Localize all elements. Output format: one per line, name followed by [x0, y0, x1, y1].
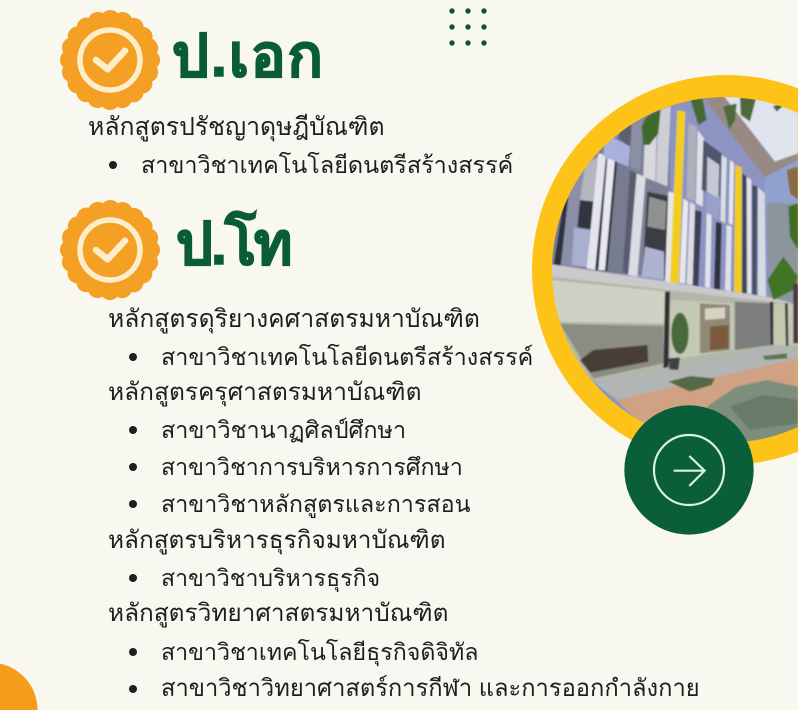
bullet item: สาขาวิชาหลักสูตรและการสอน	[161, 491, 471, 517]
text: programme 1: หลักสูตรดุริยางคศาสตรมหาบัณฑิต	[108, 306, 480, 333]
icon: PhD check badge	[60, 10, 160, 110]
decorative corner circle	[0, 664, 38, 710]
heading: Master: ป.โท	[176, 212, 290, 277]
bullet item: สาขาวิชาเทคโนโลยีธุรกิจดิจิทัล	[161, 639, 478, 665]
icon: Master check badge	[60, 200, 160, 300]
text: programme 3: หลักสูตรบริหารธุรกิจมหาบัณฑิต	[108, 527, 446, 554]
heading: PhD: ป.เอก	[172, 24, 325, 89]
button: green arrow	[624, 405, 754, 535]
photo: building in yellow ring	[532, 75, 798, 535]
text: PhD programme: หลักสูตรปรัชญาดุษฎีบัณฑิต	[88, 114, 385, 141]
bullet item: สาขาวิชาการบริหารการศึกษา	[161, 454, 463, 480]
bullet item: สาขาวิชาบริหารธุรกิจ	[161, 565, 380, 591]
text: programme 4: หลักสูตรวิทยาศาสตรมหาบัณฑิต	[108, 600, 448, 627]
text: programme 2: หลักสูตรครุศาสตรมหาบัณฑิต	[108, 379, 422, 406]
bullet item: PhD major: สาขาวิชาเทคโนโลยีดนตรีสร้างสรรค์	[141, 152, 513, 178]
bullet item: สาขาวิชานาฏศิลป์ศึกษา	[161, 417, 406, 443]
bullet item: สาขาวิชาวิทยาศาสตร์การกีฬา และการออกกำลังกาย	[161, 676, 700, 702]
bullet item: สาขาวิชาเทคโนโลยีดนตรีสร้างสรรค์	[161, 344, 533, 370]
decorative dot grid	[449, 8, 487, 46]
